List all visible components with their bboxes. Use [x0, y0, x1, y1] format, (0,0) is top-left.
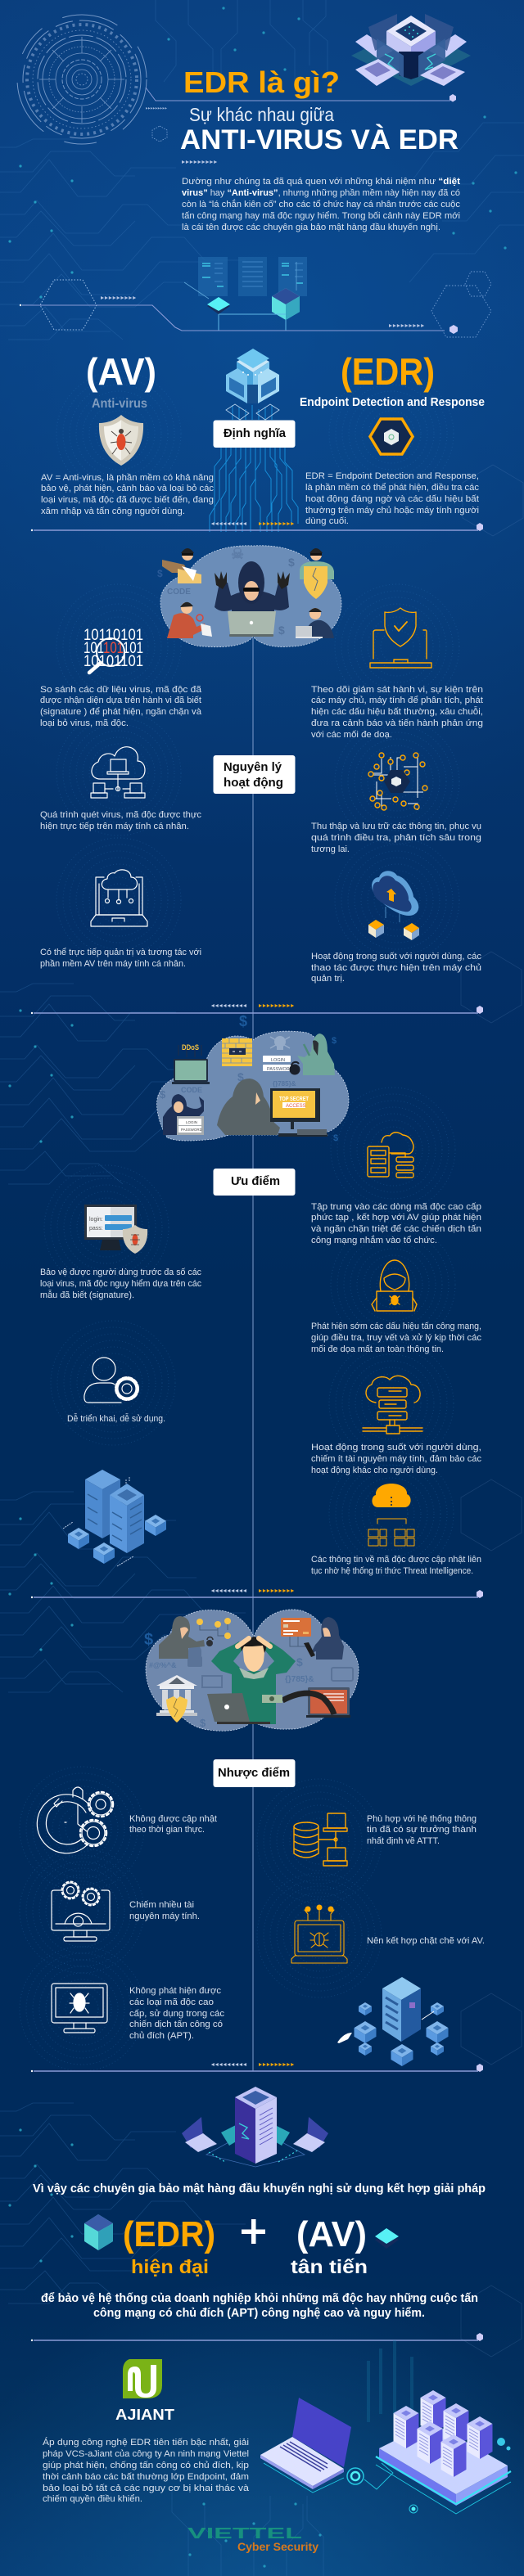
text: collect [311, 822, 481, 854]
text: AV definition: AV = Anti-virus, là phần mềm có khả năng [41, 473, 214, 483]
subheading: Anti-virus: Anti-virus [92, 397, 147, 411]
text: monitor behaviour: hiện các dấu hiệu bất thường, xâu chuỗi, [311, 706, 483, 717]
login form: PASSWORD [267, 1067, 293, 1072]
monitor top secret: TOP SECRET [279, 1097, 309, 1102]
illustration: laptop and server platform [260, 2340, 511, 2514]
arrows [211, 522, 294, 525]
section rule [31, 523, 483, 531]
text: easy: Dễ triển khai, dễ sử dụng. [67, 1413, 165, 1424]
text: transparent operation [311, 1443, 481, 1475]
text: AJIANT description: bảo loại bỏ tất cả các nguy cơ bị khai thác và [43, 2484, 250, 2493]
text: AJIANT description: pháp VCS-aJiant của công ty An ninh mạng Viettel [43, 2449, 249, 2459]
text: EDR definition: thường trên máy chủ hoặc máy tính người [305, 506, 479, 516]
text: APT undetected: các loại mã độc cao [129, 1997, 214, 2007]
laptop with DDoS [172, 1043, 210, 1084]
login form [263, 1056, 293, 1072]
money and arm from laptop [262, 1687, 350, 1718]
text: APT undetected [129, 1986, 224, 2041]
icon: circuit with hexagon [368, 753, 427, 810]
text: resource heavy [129, 1900, 200, 1921]
illustration: attack cloud: $ [332, 1036, 337, 1046]
text: AJIANT description: thời cảnh báo các bất thường lớp Endpoint, đảm [43, 2472, 249, 2482]
illustration: hackers cloud [157, 546, 341, 647]
center divider [252, 638, 254, 2071]
text: threat intelligence: tục nhờ hệ thống tri thức Threat Intelligence. [311, 1566, 473, 1576]
icon: binary magnifier: 10110101 [84, 627, 143, 644]
logo: AJIANT: AJIANT [115, 2407, 174, 2423]
icon: laptop shield [370, 608, 431, 668]
heading: EDR modern [123, 2214, 215, 2277]
text: recommendation: Vì vậy các chuyên gia bảo mật hàng đầu khuyến nghị sử dụng kết hợp giải pháp [33, 2182, 486, 2195]
label: Nhược điểm [213, 1759, 295, 1787]
text: AV definition: loại virus, mã độc đã được biết đến, đang [41, 495, 214, 505]
central hooded hacker [215, 561, 290, 622]
text: monitor behaviour: các máy chủ, máy tính để phân tích, phát [311, 696, 484, 705]
icon: orange hacker [372, 1260, 417, 1311]
heading: AV advanced: (AV) [296, 2214, 367, 2254]
brick wall [222, 1038, 252, 1066]
text: conclusion: để bảo vệ hệ thống của doanh nghiệp khỏi những mã độc hay những cuộc tấn [41, 2292, 478, 2305]
icon: laptop bug [291, 1905, 347, 1963]
coins and padlock [196, 1618, 231, 1646]
text: scan: hiện trực tiếp trên máy tính cá nhân. [40, 822, 189, 831]
logo: Viettel Cyber Security: VIETTEL [187, 2525, 302, 2542]
icon: monitor gears [52, 1882, 110, 1941]
illustration: victim cloud [144, 1610, 359, 1731]
text: EDR definition: dùng cuối. [305, 516, 349, 526]
bank [156, 1675, 197, 1723]
illustration: hackers cloud: ☠ [231, 546, 244, 562]
intro paragraph: là cái tên được các chuyên gia bảo mật hàng đầu khuyến nghị. [182, 223, 440, 232]
login form: LOGIN [271, 1058, 285, 1063]
illustration: attack cloud: $ [333, 1133, 338, 1143]
hooded navy hacker [304, 1617, 344, 1660]
icon: binary magnifier: 101101101 [84, 640, 143, 657]
text: collect: Thu thập và lưu trữ các thông tin, phục vụ [311, 822, 481, 831]
text: detect early: Phát hiện sớm các dấu hiệu tấn công mạng, [311, 1322, 481, 1331]
hooded grey hacker [159, 1616, 205, 1659]
illustration: victim cloud: $ [200, 1717, 206, 1729]
label: Định nghĩa [213, 421, 295, 448]
plus sign [242, 2219, 265, 2244]
text: protect [40, 1268, 201, 1300]
text: monitor behaviour [311, 685, 484, 740]
icon: blue server towers [63, 1470, 166, 1566]
icon: stopwatch gears [37, 1787, 113, 1853]
intro paragraph: còn là “lá chắn kiên cố” cho các tổ chức hay cá nhân trước các cuộc [182, 199, 460, 209]
heading: EDR: (EDR) [341, 350, 435, 393]
text: transparent: Hoạt động trong suốt với người dùng, các [311, 952, 481, 961]
text: scan: Quá trình quét virus, mã độc được thực [40, 810, 201, 820]
text: monitor behaviour: đưa ra cảnh báo và tiến hành phản ứng [311, 718, 483, 728]
illustration: hackers cloud: $ [157, 568, 163, 579]
text: mature systems: Phù hợp với hệ thống thông [367, 1814, 477, 1824]
intro paragraph: Dường như chúng ta đã quá quen với những khái niệm như “diệt [182, 177, 460, 187]
text: compare data: loại bỏ virus, mã độc. [40, 718, 129, 728]
icon: teal cube [84, 2214, 113, 2250]
intro paragraph: virus” hay “Anti-virus”, nhưng những phần mềm này hiện nay đã có [182, 188, 460, 198]
subtitle: Sự khác nhau giữa [189, 104, 334, 125]
text: threat intelligence: Các thông tin về mã độc được cập nhật liên [311, 1555, 481, 1565]
icon: server racks and cubes [184, 257, 307, 331]
text: mature systems: tin đã có sự trưởng thành [367, 1825, 477, 1835]
icon: central server with circuit [210, 349, 298, 532]
text: AJIANT description: giúp phát hiện, chống tấn công có chủ đích, kịp [43, 2461, 249, 2470]
header footer rule and hexagons [20, 272, 491, 337]
icon: monitor login with shield: login: [89, 1217, 103, 1223]
text: EDR definition: là phần mềm có thể phát hiện, điều tra các [305, 483, 479, 493]
icon: circular HUD graphic [17, 15, 147, 144]
illustration: attack cloud: $ [237, 1070, 244, 1083]
hacker: magnifier [167, 602, 212, 638]
text: no realtime: Không được cập nhật [129, 1814, 218, 1824]
title: EDR là gì? [183, 65, 340, 99]
arrows [182, 160, 217, 164]
text: transparent operation: chiếm ít tài nguyên máy tính, đảm bảo các [311, 1454, 481, 1464]
credit card [281, 1618, 311, 1646]
illustration: hackers cloud: $ [278, 624, 285, 637]
illustration: attack cloud: $ [239, 1013, 247, 1029]
logo: AJIANT [115, 2359, 174, 2423]
laptop with DDoS: DDoS [182, 1043, 199, 1052]
icon: orange cloud tree [368, 1484, 414, 1546]
text: mature systems [367, 1814, 477, 1846]
text: transparent: thao tác được thực hiện trên máy chủ [311, 963, 481, 973]
text: EDR definition: EDR = Endpoint Detection and Response, [305, 471, 479, 481]
icon: blue cloud with cubes [368, 871, 419, 940]
hacker: broken shield [300, 548, 334, 599]
section: definition [31, 349, 485, 532]
icon: monitor login with shield: pass: [89, 1226, 103, 1232]
arrows [211, 1004, 294, 1007]
text: detect early [311, 1322, 481, 1354]
worried man [211, 1637, 296, 1724]
text: AJIANT description [43, 2437, 250, 2504]
logo: Viettel Cyber Security [187, 2525, 318, 2553]
icon: binary magnifier: 10101101 [84, 653, 143, 670]
laptop [228, 611, 276, 637]
label: Ưu điểm [213, 1169, 295, 1196]
text: APT undetected: chiến dịch tấn công có [129, 2020, 223, 2029]
icon: isometric server with laptops [351, 14, 471, 86]
text: collect: tương lai. [311, 844, 350, 854]
section rule [31, 2064, 483, 2072]
skull [270, 1036, 290, 1050]
text: transparent operation: hoạt động khác cho người dùng. [311, 1466, 438, 1475]
illustration: attack cloud [157, 1013, 349, 1143]
text: APT undetected: chủ đích (APT). [129, 2031, 194, 2041]
text: APT undetected: Không phát hiện được [129, 1986, 221, 1996]
label: Ưu điểm: Ưu điểm [231, 1174, 280, 1188]
icon: laptop cloud [91, 870, 147, 926]
text: resource heavy: nguyên máy tính. [129, 1912, 200, 1921]
text: AV definition [41, 473, 214, 516]
section rule [31, 1006, 483, 1014]
text: transparent [311, 952, 481, 984]
section rule [31, 2333, 483, 2341]
illustration: victim cloud: {}785}& [285, 1675, 314, 1684]
icon: cloud network [91, 747, 145, 798]
icon: orange hexagon [370, 419, 413, 454]
text: resource heavy: Chiếm nhiều tài [129, 1900, 194, 1910]
icon: orange servers cloud [368, 1133, 413, 1178]
text: focus [311, 1202, 481, 1245]
text: combine: Nên kết hợp chặt chẽ với AV. [367, 1936, 485, 1946]
icon: user with gear [84, 1358, 138, 1403]
main heading: ANTI-VIRUS VÀ EDR [180, 124, 458, 155]
label: Nhược điểm: Nhược điểm [218, 1766, 290, 1780]
text: threat intelligence [311, 1555, 481, 1576]
text: manage [40, 948, 201, 969]
text: AV definition: bảo vệ, phát hiện, cảnh báo và loại bỏ các [41, 484, 214, 493]
text: collect: quá trình điều tra, phân tích sâu trong [311, 833, 481, 843]
text: focus: và ngăn chặn triệt để các chiến dịch tấn [311, 1224, 481, 1234]
text: focus: Tập trung vào các dòng mã độc cao cấp [311, 1202, 481, 1212]
text: manage: phần mềm AV trên máy tính cá nhân. [40, 959, 186, 969]
text: no realtime: theo thời gian thực. [129, 1825, 205, 1835]
icon: orange cloud server [363, 1376, 422, 1434]
illustration: attack cloud: $ [160, 1088, 166, 1101]
text: protect: loại virus, mã độc nguy hiểm dựa trên các [40, 1279, 201, 1289]
text: detect early: mối đe dọa mất an toàn thông tin. [311, 1344, 444, 1354]
illustration: hackers cloud: CODE [167, 588, 191, 597]
label: Nguyên lý hoạt động: Nguyên lý [224, 760, 282, 774]
text: AJIANT description: chiếm quyền điều khiển. [43, 2494, 142, 2504]
hacker: folder [162, 548, 201, 583]
text: AJIANT description: Áp dụng công nghệ EDR tiên tiến bậc nhất, giải [43, 2437, 249, 2448]
heading: AV advanced: tân tiến [291, 2256, 368, 2277]
dark hooded hacker with login: LOGIN [186, 1120, 197, 1124]
label: Nguyên lý hoạt động: hoạt động [224, 776, 283, 790]
text: monitor behaviour: Theo dõi giám sát hành vi, sự kiện trên [311, 685, 483, 695]
text: manage: Có thể trực tiếp quản trị và tương tác với [40, 948, 201, 957]
laptop [207, 1693, 270, 1724]
text: focus: phức tạp , kết hợp với AV giúp phát hiện [311, 1213, 481, 1223]
hacker: laptop [296, 608, 334, 638]
monitor top secret [270, 1088, 328, 1135]
text: protect: Bảo vệ được người dùng trước đa số các [40, 1268, 201, 1277]
icon: server with nodes [337, 1977, 449, 2066]
text: compare data: So sánh các dữ liệu virus, mã độc đã [40, 685, 202, 695]
text: compare data: được nhận diện dựa trên hành vi đã biết [40, 696, 202, 705]
text: monitor behaviour: với các mối đe doạ. [311, 730, 392, 740]
subheading: Endpoint Detection and Response: Endpoint Detection and Response [300, 396, 485, 409]
text: AV definition: xâm nhập và tấn công người dùng. [41, 507, 185, 516]
text: focus: công mạng nhắm vào tổ chức. [311, 1235, 437, 1245]
section rule [31, 1590, 483, 1598]
label: Nguyên lý hoạt động [213, 755, 295, 794]
arrows [211, 2063, 294, 2066]
text: mature systems: nhất định về ATTT. [367, 1836, 440, 1846]
heading: EDR modern: hiện đại [131, 2256, 209, 2277]
arrows [211, 1589, 294, 1592]
hooded grey hacker [217, 1079, 280, 1135]
text: EDR definition: hoạt động đáng ngờ và các dấu hiệu bất [305, 494, 480, 504]
illustration: attack cloud: CODE [181, 1086, 202, 1094]
text: scan [40, 810, 201, 831]
text: EDR definition [305, 471, 480, 526]
icon: teal diamond [375, 2228, 399, 2249]
icon: shield with red bug [99, 415, 143, 466]
hooded teal hacker [290, 1034, 335, 1075]
illustration: victim cloud: $ [296, 1655, 303, 1669]
illustration: attack cloud: {}785}& [273, 1080, 296, 1088]
text: conclusion [41, 2292, 478, 2320]
intro paragraph: tấn công mạng hay mã độc nguy hiểm. Trong bối cảnh này EDR mới [182, 211, 460, 221]
icon: monitor with bug [52, 1984, 107, 2033]
icon: database network [294, 1813, 347, 1866]
text: transparent: quản trị. [311, 974, 345, 984]
text: detect early: giúp điều tra, truy vết và xử lý kịp thời các [311, 1333, 481, 1343]
illustration: victim cloud: #@%^& [149, 1661, 177, 1669]
text: transparent operation: Hoạt động trong suốt với người dùng, [311, 1443, 481, 1452]
text: protect: mẫu đã biết (signature). [40, 1290, 134, 1300]
label: Định nghĩa: Định nghĩa [224, 426, 287, 440]
text: compare data [40, 685, 202, 728]
heading: EDR modern: (EDR) [123, 2214, 215, 2254]
illustration: purple server with laptops [182, 2087, 328, 2167]
text: compare data: (signature ) để phát hiện, ngăn chặn và [40, 707, 202, 717]
dark hooded hacker with login: PASSWORD [181, 1128, 203, 1132]
intro paragraph [182, 177, 460, 232]
text: APT undetected: cấp, sử dụng trong các [129, 2009, 224, 2019]
heading: AV advanced [291, 2214, 368, 2277]
illustration: victim cloud: $ [144, 1631, 153, 1649]
text: no realtime [129, 1814, 218, 1835]
heading: AV: (AV) [86, 350, 156, 393]
monitor top secret: ACCESS [286, 1104, 306, 1109]
title connector [146, 88, 456, 142]
icon: binary magnifier [84, 627, 143, 673]
illustration: hackers cloud: $ [288, 556, 295, 569]
dark hooded hacker with login [163, 1094, 204, 1135]
icon: monitor login with shield [84, 1205, 147, 1254]
logo: Viettel Cyber Security: Cyber Security [237, 2540, 318, 2553]
text: conclusion: công mạng có chủ đích (APT) công nghệ cao và nguy hiểm. [93, 2307, 425, 2320]
